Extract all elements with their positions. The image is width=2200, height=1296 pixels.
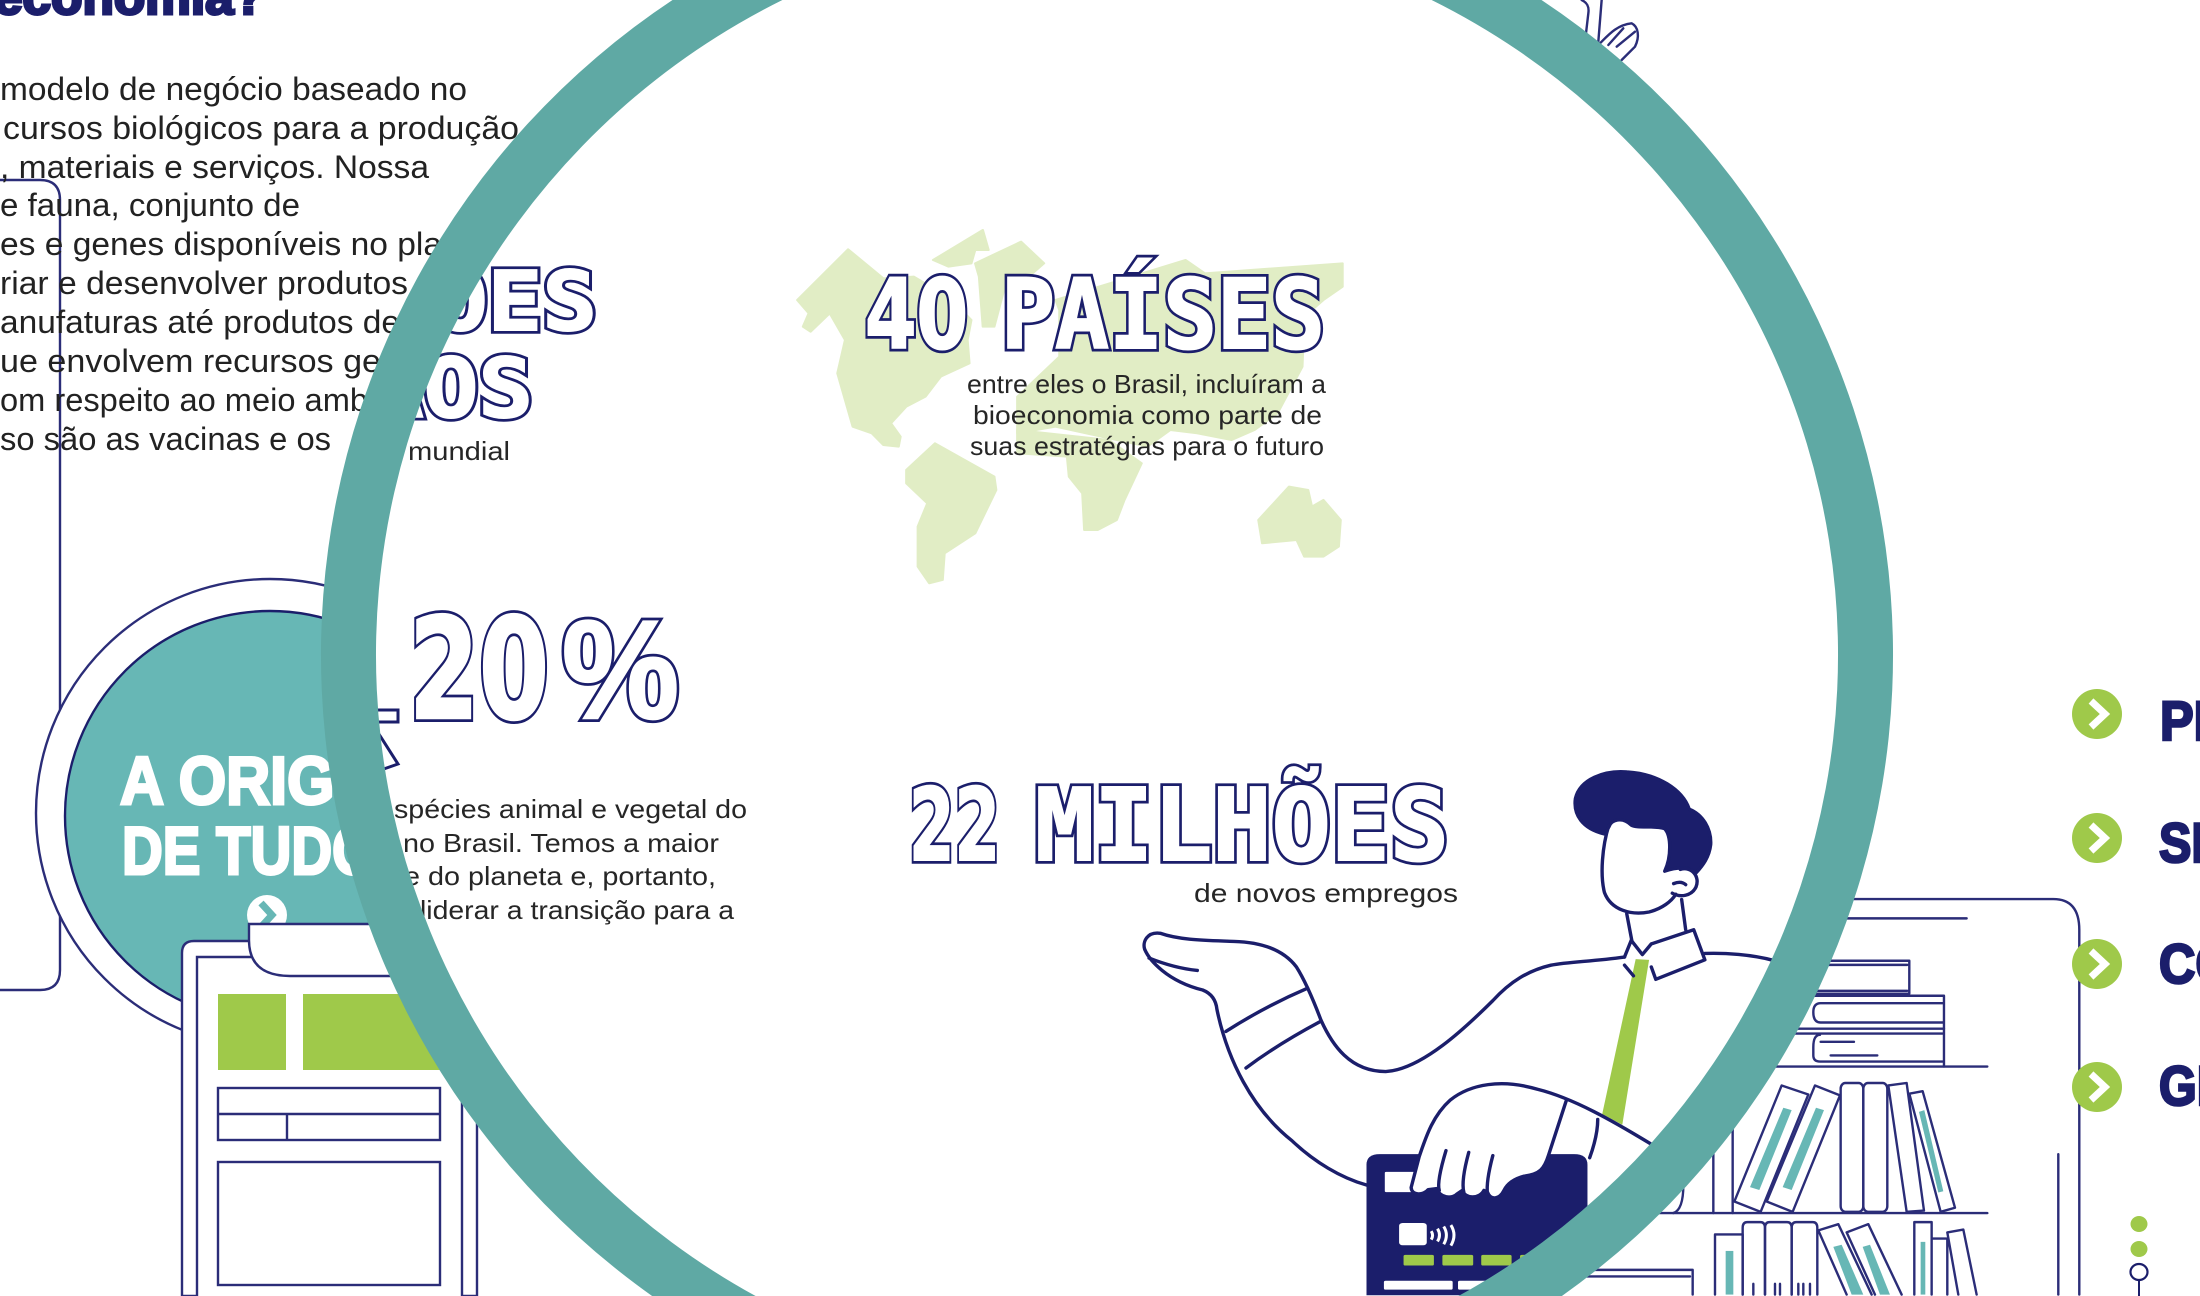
- stat: 40 países: PAÍSES: [1001, 258, 1325, 371]
- stat: 22 milhões: [909, 766, 1458, 908]
- stat: 22 milhões: de novos empregos: [1194, 878, 1458, 908]
- text block: definition paragraph: riar e desenvolver produtos: [0, 265, 408, 301]
- stat: 20%: %: [562, 591, 679, 748]
- stat: 20%: e do planeta e, portanto,: [404, 861, 716, 891]
- text block: definition paragraph: so são as vacinas e os: [0, 421, 331, 457]
- badge: a origem de tudo: DE TUDO: [122, 813, 376, 889]
- figure line art: [1144, 772, 1774, 1198]
- stat: trilhões: ÃOS: [369, 340, 533, 437]
- panel: definition outline: [0, 180, 60, 990]
- timeline dots: [2130, 1216, 2148, 1296]
- stat: 40 países: PAÍSES: [1001, 258, 1325, 371]
- list: sectors with chevron bullets: [2072, 689, 2200, 1117]
- stat: trilhões: ÕES: [433, 253, 597, 350]
- stat: 40 países: bioeconomia como parte de: [973, 400, 1322, 430]
- lens interior background: [362, 0, 1852, 1296]
- credit card: [1367, 1154, 1587, 1295]
- teal ring: [321, 0, 1893, 1296]
- stat: 20%: spécies animal e vegetal do: [394, 794, 747, 824]
- stat: 22 milhões: MILHÕES: [1035, 766, 1449, 884]
- world map: [797, 230, 1343, 583]
- stat: 40 países: [865, 258, 1327, 461]
- stat: 20%: 20: [409, 589, 549, 752]
- stat: 20%: no Brasil. Temos a maior: [403, 828, 719, 858]
- text block: definition paragraph: om respeito ao meio amb: [0, 382, 368, 418]
- text block: definition paragraph: anufaturas até produtos de: [0, 304, 400, 340]
- badge: a origem de tudo: [36, 579, 504, 1047]
- text block: definition paragraph: cursos biológicos para a produção: [3, 110, 519, 146]
- stat: trilhões: ÃOS: [369, 340, 533, 437]
- stat: 20%: [378, 610, 746, 924]
- stat: 40 países: 40: [865, 258, 968, 371]
- stat: 22 milhões: 22: [909, 767, 1000, 884]
- lens contents: [360, 230, 1774, 1295]
- text block: definition paragraph: es e genes disponíveis no pla: [0, 226, 442, 262]
- stat: trilhões: [410, 265, 596, 460]
- icon: clipboard document: [182, 924, 477, 1296]
- text block: definition paragraph: ue envolvem recursos ge: [0, 343, 381, 379]
- stat: 40 países: 40: [865, 258, 968, 371]
- stat: 20%: liderar a transição para a: [420, 895, 735, 925]
- text block: definition paragraph: , materiais e serviços. Nossa: [0, 149, 429, 185]
- stat: 20%: %: [562, 591, 679, 748]
- stat: 40 países: entre eles o Brasil, incluíram a: [967, 369, 1327, 399]
- illustration: bookshelf: [1583, 899, 2079, 1295]
- text block: definition paragraph: [0, 71, 519, 457]
- badge: a origem de tudo: A ORIGEM: [120, 743, 426, 819]
- stat: 22 milhões: MILHÕES: [1035, 766, 1449, 884]
- stat: trilhões: mundial: [408, 436, 510, 466]
- tie: [1602, 959, 1649, 1125]
- icon: leaves at top right: [1582, 0, 1638, 60]
- stat: 20%: 20: [409, 589, 549, 752]
- stat: trilhões: ÕES: [433, 253, 597, 350]
- stat: 22 milhões: 22: [909, 767, 1000, 884]
- text block: definition paragraph: e fauna, conjunto de: [0, 187, 300, 223]
- illustration: man holding card: [1144, 772, 1774, 1295]
- illustration: book spine accents: [1726, 1108, 1943, 1295]
- text block: definition paragraph: modelo de negócio baseado no: [0, 71, 467, 107]
- stat: 40 países: suas estratégias para o futuro: [970, 431, 1324, 461]
